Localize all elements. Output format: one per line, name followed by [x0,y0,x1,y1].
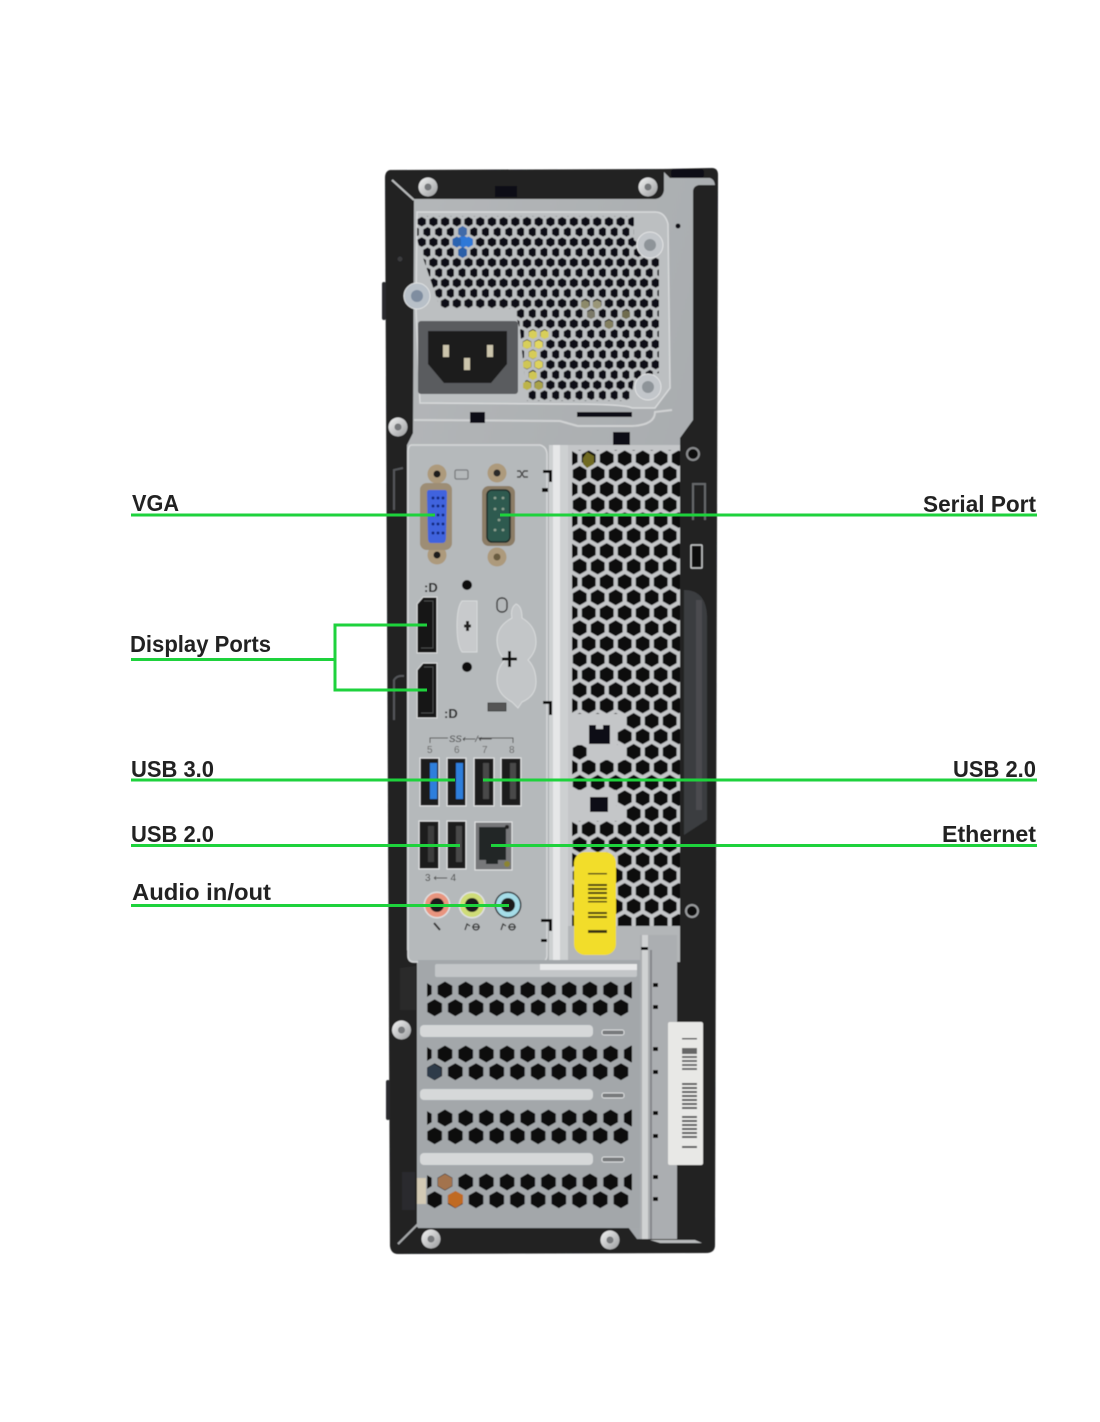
USB legend bottom: 3 ⟵ 4 [425,873,456,884]
ventilation plate [549,445,680,962]
callout: VGA: VGA [132,490,179,516]
callout: Display Ports [130,625,427,690]
serial port [482,464,515,566]
power supply vent grille [417,216,659,401]
vent colour reflections [417,1064,463,1208]
large hex vent [572,450,680,926]
icon: keyboard [488,703,506,711]
expansion slot panel [417,960,644,1228]
USB legend top: SS⟵/⟵ [449,734,492,745]
knock-outs [457,580,536,708]
callout: Ethernet: Ethernet [942,821,1036,847]
slot cover ribs [420,1025,593,1165]
icon: serial [517,471,528,477]
icon: monitor [455,470,468,479]
USB legend top: 8 [509,745,515,756]
USB legend top: 6 [454,745,460,756]
display port upper [417,597,437,653]
audio jacks [424,892,522,918]
callout: USB 2.0 left: USB 2.0 [131,821,214,847]
desktop tower rear photo [382,168,718,1254]
top rail [435,964,637,977]
callout: Audio in/out: Audio in/out [132,879,271,905]
I/O shield [408,445,552,962]
callout: Display Ports: Display Ports [130,631,271,657]
slot cover pills [602,1030,624,1162]
USB legend top [427,734,515,756]
VGA port [420,464,452,564]
plain metal around square cut-outs [572,714,625,821]
icon: mouse [497,598,507,612]
USB legend top: 7 [482,745,488,756]
callout: USB 3.0: USB 3.0 [131,756,214,782]
yellow barcode sticker [574,852,616,955]
white barcode label [668,1022,703,1165]
USB 2.0 lower ports [419,821,466,869]
slot retention strip [640,935,677,1239]
bottom corner tab [650,1240,702,1243]
power supply panel [414,212,672,426]
ethernet port [475,822,512,870]
chassis cut-outs [398,169,704,445]
display port icon bottom: :D [444,706,458,721]
callout: USB 2.0 right: USB 2.0 [953,756,1036,782]
side bumps and rails [382,282,707,1210]
chassis black frame [385,168,718,1254]
slot vent rows [427,980,632,1210]
screws [388,178,699,1250]
grille colour reflections [452,226,630,390]
USB 2.0 upper ports [474,758,521,806]
USB 3.0 ports [420,758,466,806]
square cut-outs [589,725,610,744]
metal back plate [407,172,715,1239]
audio icons [434,923,516,930]
display port lower [417,663,437,718]
display port icon top: :D [424,580,438,595]
power inlet socket [418,321,518,394]
callout: Serial Port: Serial Port [923,491,1036,517]
diagonal frame lines [392,180,424,1244]
shield tabs [541,470,552,942]
USB legend top: 5 [427,745,433,756]
